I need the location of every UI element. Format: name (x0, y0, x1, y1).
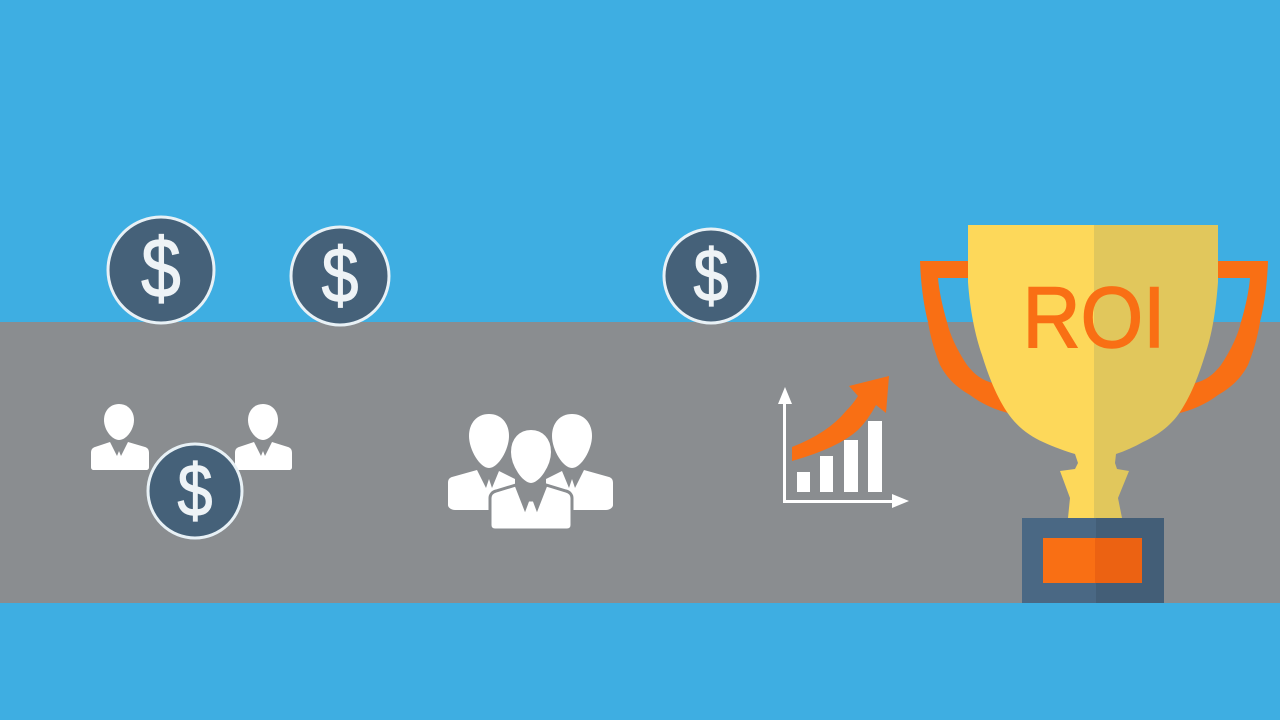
trophy cup left half (968, 225, 1094, 518)
center person (510, 429, 552, 484)
icon: right person (235, 404, 292, 470)
coin: dollar 3 (664, 229, 758, 323)
orange growth arrow (792, 376, 889, 461)
coin: dollar 4: $ (178, 449, 212, 532)
icon: two investors with coin (91, 404, 292, 538)
coin: dollar 3: $ (694, 234, 728, 317)
chart axes (784, 398, 898, 502)
axis arrowheads (778, 387, 792, 404)
trophy (920, 225, 1268, 603)
ROI label: ROI (1022, 270, 1166, 366)
coin: dollar 2 (291, 227, 389, 325)
icon: left person (91, 404, 149, 470)
coin: dollar 2: $ (322, 232, 358, 319)
icon: team of three people (448, 414, 613, 530)
gray band (0, 322, 1280, 603)
trophy base (1022, 518, 1164, 603)
trophy right handle (1176, 261, 1268, 414)
left person (469, 414, 509, 468)
right person (552, 414, 592, 468)
icon: growth bar chart (778, 376, 909, 508)
coin: dollar 1 (108, 217, 214, 323)
trophy left handle (920, 261, 1012, 414)
coin: dollar 4 (148, 444, 242, 538)
trophy cup right half (1094, 225, 1218, 518)
coin: dollar 1: $ (141, 220, 181, 315)
chart bars (797, 421, 882, 492)
trophy plate (1043, 538, 1095, 583)
